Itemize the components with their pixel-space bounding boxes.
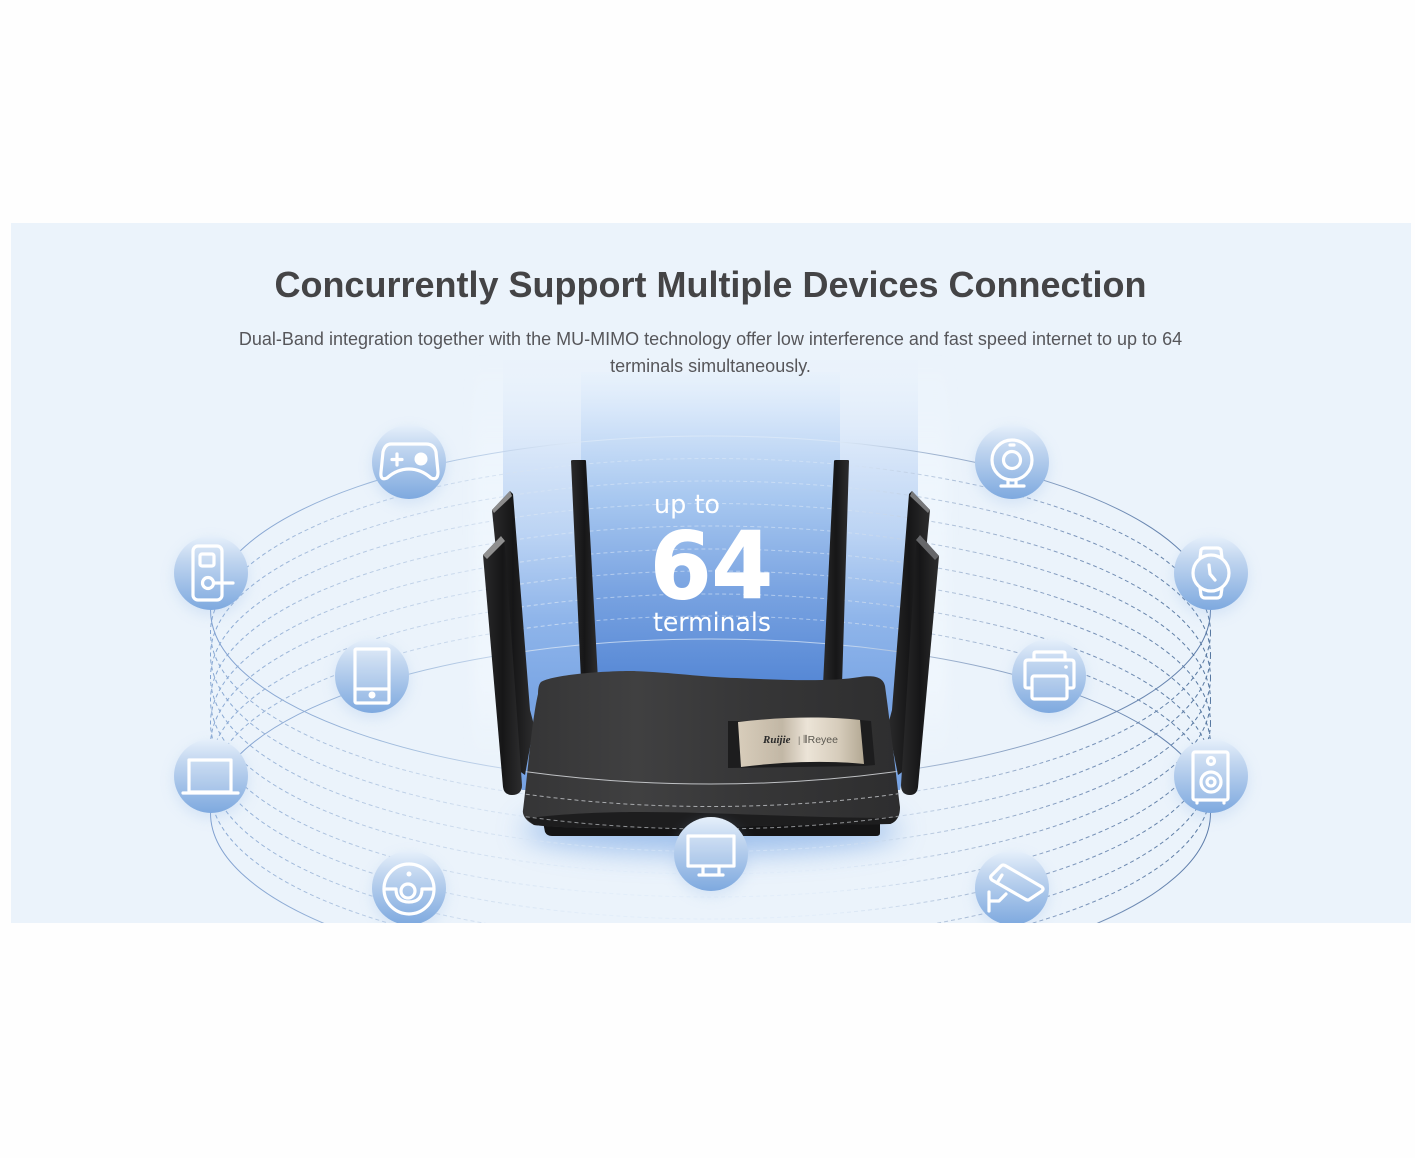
panel: light blue background — [11, 223, 1411, 923]
router glow — [521, 806, 901, 854]
antenna: back right — [823, 460, 849, 685]
infographic — [11, 223, 1411, 923]
title: Concurrently Support Multiple Devices Connection — [274, 264, 1147, 305]
brand plate: ⦀Reyee — [803, 734, 838, 746]
callout: up to 64 terminals: up to — [654, 490, 720, 520]
signal beams behind router — [503, 387, 918, 790]
ring lines over router front — [526, 771, 898, 830]
brand plate — [738, 718, 864, 767]
icon: smart lock — [174, 536, 248, 615]
brand text: Ruijie — [762, 734, 791, 746]
icon: webcam — [975, 425, 1049, 504]
antenna: rear right — [888, 491, 930, 775]
antenna: front right — [901, 535, 939, 795]
brand plate recess — [728, 720, 875, 768]
icon: speaker — [1174, 739, 1248, 818]
router body — [523, 671, 900, 836]
icon: game controller — [372, 425, 446, 504]
antenna: front left — [483, 536, 522, 795]
icon: phone — [335, 639, 409, 718]
subtitle — [239, 329, 1182, 376]
concentric connection rings — [210, 436, 1211, 923]
icon: desktop monitor — [674, 817, 748, 896]
brand plate: | — [798, 735, 800, 745]
icon: printer — [1012, 639, 1086, 718]
subtitle: Dual-Band integration together with the MU-MIMO technology offer low interference and fast speed internet to up to 64 — [239, 329, 1182, 349]
icon: security camera — [975, 851, 1049, 930]
callout: up to 64 terminals: 64 — [650, 512, 773, 620]
icon: laptop — [174, 739, 248, 818]
antenna: rear left — [492, 491, 534, 775]
callout: up to 64 terminals: terminals — [653, 608, 771, 638]
icon: robot vacuum — [372, 851, 446, 930]
subtitle: terminals simultaneously. — [610, 356, 811, 376]
antenna: back left — [571, 460, 598, 680]
icon: smart watch — [1174, 536, 1248, 615]
